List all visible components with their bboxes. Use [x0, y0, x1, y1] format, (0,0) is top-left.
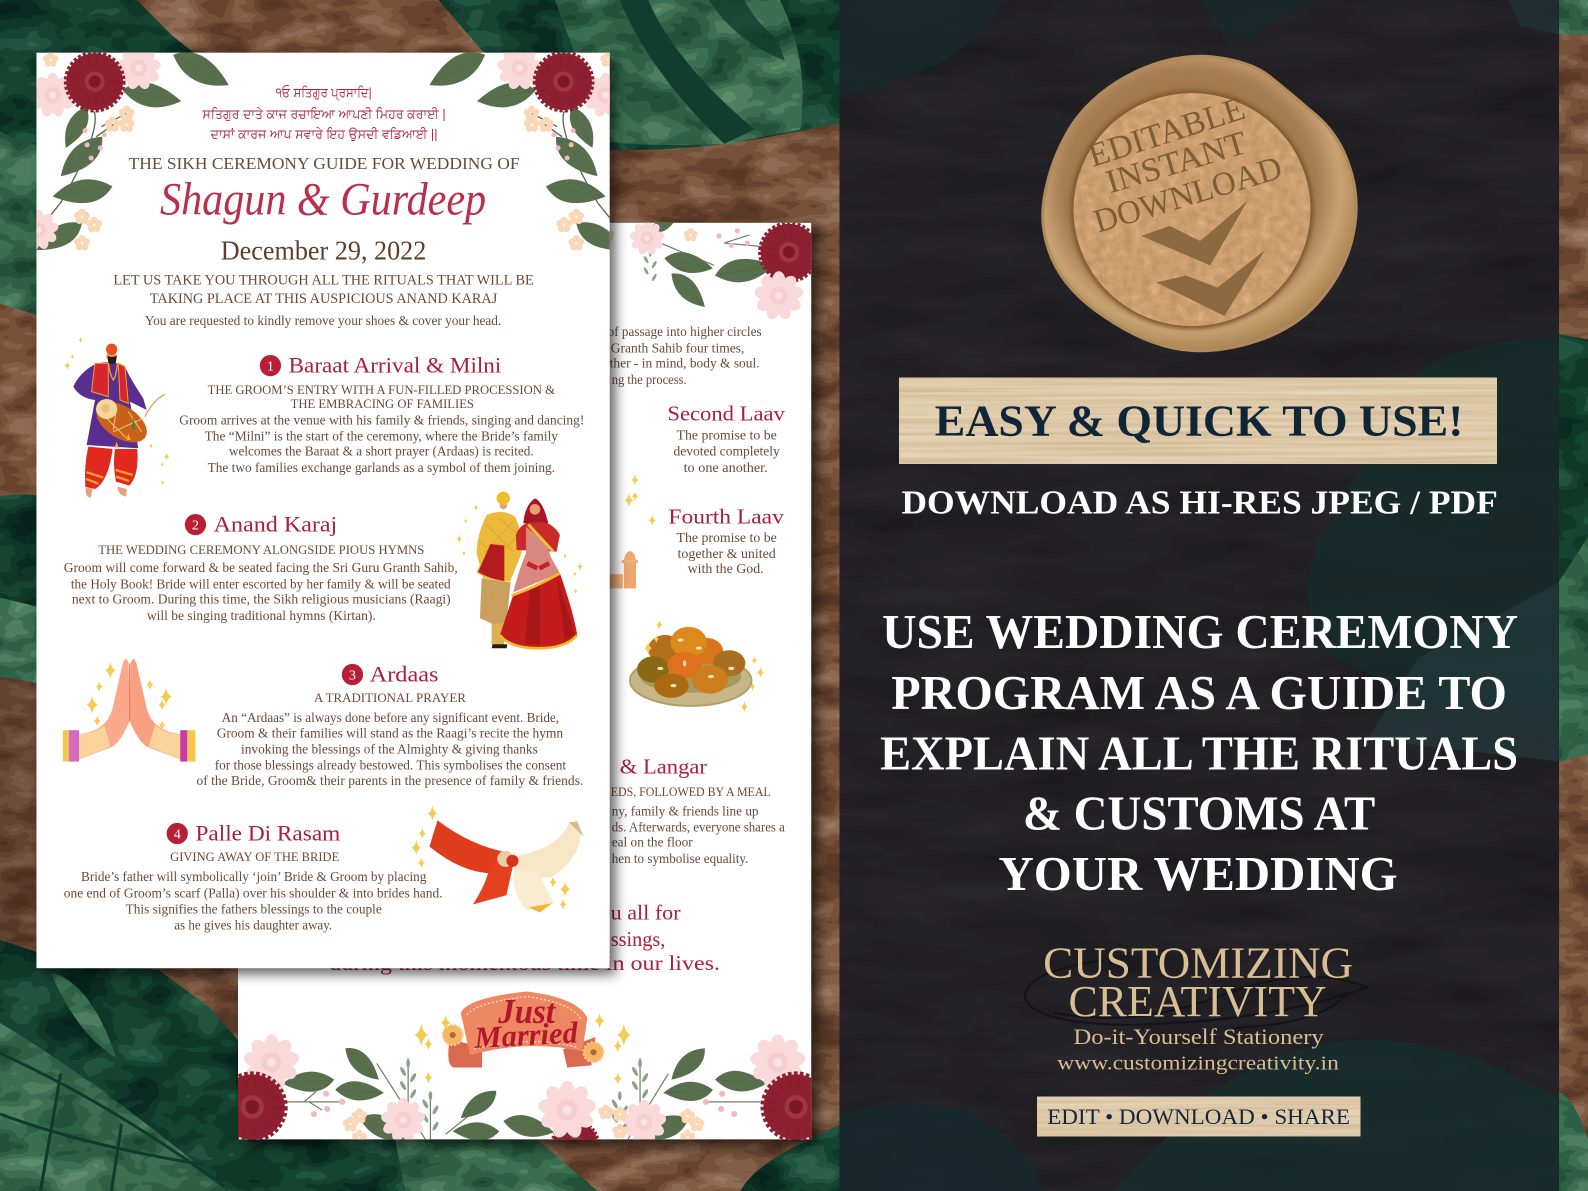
- section 3: ardaas: Groom & their families will stand as the Raagi’s recite the hymn: [217, 725, 563, 740]
- section 2: anand karaj: [64, 512, 458, 624]
- section 4: palle di rasam: [64, 821, 443, 933]
- intro text: You are requested to kindly remove your shoes & cover your head.: [145, 313, 501, 328]
- intro text: LET US TAKE YOU THROUGH ALL THE RITUALS THAT WILL BE: [113, 273, 534, 289]
- section: ang langar: ny, family & friends line up: [612, 803, 759, 818]
- closing thank you message: u all for: [611, 901, 681, 925]
- just married banner: Just: [497, 993, 556, 1031]
- main message: YOUR WEDDING: [999, 847, 1398, 901]
- fourth laav: with the God.: [688, 561, 764, 576]
- icon: bride and groom: [457, 492, 583, 648]
- wax seal badge: DOWNLOAD: [1089, 149, 1286, 241]
- section 2: anand karaj: Anand Karaj: [214, 512, 337, 537]
- brand logo: www.customizingcreativity.in: [1057, 1052, 1339, 1074]
- brand logo: CREATIVITY: [1068, 976, 1327, 1026]
- fourth laav: Fourth Laav: [668, 505, 784, 529]
- gurmukhi blessing: [202, 85, 446, 142]
- section 3: ardaas: for those blessings already bestowed. This symbolises the consent: [215, 758, 566, 773]
- section 3: ardaas: [196, 662, 583, 788]
- just married banner: [414, 991, 631, 1085]
- main message: & CUSTOMS AT: [1023, 786, 1375, 840]
- section 3: ardaas: of the Bride, Groom& their parents in the presence of family & friends.: [196, 773, 583, 788]
- section: ang langar: hen to symbolise equality.: [612, 851, 748, 866]
- section 4: palle di rasam: This signifies the fathers blessings to the couple: [126, 902, 382, 917]
- title: THE SIKH CEREMONY GUIDE FOR WEDDING OF: [129, 154, 520, 173]
- section 3: ardaas: invoking the blessings of the Almighty & giving thanks: [241, 741, 538, 756]
- section 4: palle di rasam: as he gives his daughter away.: [174, 918, 332, 933]
- section 3: ardaas: 3: [349, 668, 356, 684]
- closing thank you message: [329, 901, 720, 975]
- brand logo: CUSTOMIZING: [1043, 937, 1353, 987]
- section: ang langar: EDS, FOLLOWED BY A MEAL: [611, 785, 771, 799]
- bottom floral border: [238, 1034, 812, 1140]
- main message: USE WEDDING CEREMONY: [882, 605, 1518, 659]
- section 4: palle di rasam: one end of Groom’s scarf (Palla) over his shoulder & into brides hand.: [64, 885, 443, 901]
- icon: dhol player: [64, 337, 169, 498]
- section 1: baraat arrival and milni: 1: [267, 359, 274, 375]
- section 3: ardaas: Ardaas: [370, 662, 439, 687]
- intro text: [113, 273, 534, 328]
- gurmukhi blessing: ੧ਓ ਸਤਿਗੁਰ ਪ੍ਰਸਾਦਿ|: [275, 85, 372, 103]
- gurmukhi blessing: ਦਾਸਾਂ ਕਾਰਜ ਆਪ ਸਵਾਰੇ ਇਹ ਉਸਦੀ ਵਡਿਆਈ ||: [210, 127, 438, 142]
- second laav: The promise to be: [677, 428, 777, 443]
- section 1: baraat arrival and milni: [179, 353, 584, 475]
- icon: praying hands: [63, 659, 195, 762]
- section 3: ardaas: A TRADITIONAL PRAYER: [314, 691, 466, 705]
- fourth laav: together & united: [678, 546, 776, 561]
- section 1: baraat arrival and milni: welcomes the Baraat & a short prayer (Ardaas) is recited.: [229, 444, 534, 460]
- icon: temple tower: [608, 474, 656, 588]
- icon: plate of ladoos: [630, 620, 764, 713]
- fourth laav: The promise to be: [677, 530, 777, 545]
- second laav: Second Laav: [667, 401, 785, 425]
- section 4: palle di rasam: Bride’s father will symbolically ‘join’ Bride & Groom by placing: [81, 869, 427, 884]
- section 1: baraat arrival and milni: THE GROOM’S ENTRY WITH A FUN-FILLED PROCESSION &: [208, 383, 555, 397]
- dark right panel: [840, 0, 1559, 1191]
- section: ang langar: ds. Afterwards, everyone shares a: [612, 819, 785, 834]
- first laav text: of passage into higher circles: [608, 324, 762, 339]
- section 2: anand karaj: the Holy Book! Bride will enter escorted by her family & will be seated: [71, 576, 451, 591]
- second laav: [667, 401, 785, 475]
- top right floral corner: [430, 52, 610, 250]
- icon: palla scarf knot: [411, 805, 583, 912]
- second laav: devoted completely: [673, 444, 780, 459]
- section 3: ardaas: An “Ardaas” is always done before any significant event. Bride,: [222, 710, 559, 725]
- section: ang langar: eal on the floor: [612, 835, 693, 850]
- main message: PROGRAM AS A GUIDE TO: [891, 666, 1507, 720]
- wax seal badge: INSTANT: [1102, 124, 1251, 201]
- gurmukhi blessing: ਸਤਿਗੁਰ ਦਾਤੇ ਕਾਜ ਰਚਾਇਆ ਆਪਣੀ ਮਿਹਰ ਕਰਾਈ |: [202, 106, 446, 121]
- fourth laav: [668, 505, 784, 576]
- closing thank you message: during this momentous time in our lives.: [329, 951, 720, 975]
- main message: EXPLAIN ALL THE RITUALS: [880, 727, 1518, 781]
- section 2: anand karaj: will be singing traditional hymns (Kirtan).: [147, 608, 376, 624]
- wood banner: easy and quick: [899, 378, 1497, 464]
- front card: program page one: [18, 44, 629, 974]
- second laav: to one another.: [684, 460, 768, 475]
- back card: program page two: [220, 218, 829, 1167]
- couple names: Shagun & Gurdeep: [160, 174, 486, 226]
- section 1: baraat arrival and milni: Baraat Arrival & Milni: [289, 353, 501, 378]
- section 4: palle di rasam: 4: [174, 827, 181, 843]
- top floral corner: [610, 222, 812, 319]
- main message: [880, 605, 1518, 901]
- top left floral corner: [36, 52, 229, 250]
- intro text: TAKING PLACE AT THIS AUSPICIOUS ANAND KARAJ: [150, 291, 498, 307]
- first laav text: [608, 324, 762, 387]
- wood banner: edit download share: EDIT • DOWNLOAD • SHARE: [1047, 1104, 1350, 1129]
- section 2: anand karaj: 2: [192, 518, 199, 534]
- first laav text: Granth Sahib four times,: [611, 340, 744, 355]
- closing thank you message: ssings,: [611, 927, 665, 951]
- section 1: baraat arrival and milni: The two families exchange garlands as a symbol of them joining.: [208, 460, 555, 475]
- section 4: palle di rasam: GIVING AWAY OF THE BRIDE: [170, 850, 340, 864]
- wood banner: easy and quick: EASY & QUICK TO USE!: [935, 395, 1463, 445]
- download subtitle: DOWNLOAD AS HI-RES JPEG / PDF: [901, 484, 1498, 521]
- section 2: anand karaj: next to Groom. During this time, the Sikh religious musicians (Raagi): [72, 592, 451, 608]
- brand logo: Do-it-Yourself Stationery: [1074, 1024, 1325, 1049]
- brand logo: [1025, 937, 1367, 1074]
- section: ang langar: & Langar: [620, 755, 707, 779]
- section 1: baraat arrival and milni: Groom arrives at the venue with his family & friends, singing and dancing!: [179, 412, 584, 427]
- section 1: baraat arrival and milni: The “Milni” is the start of the ceremony, where the Bride’s family: [205, 429, 558, 444]
- section 2: anand karaj: THE WEDDING CEREMONY ALONGSIDE PIOUS HYMNS: [98, 543, 424, 557]
- first laav text: ng the process.: [612, 372, 687, 387]
- wedding date: December 29, 2022: [221, 235, 426, 265]
- wax seal badge: EDITABLE: [1084, 90, 1249, 175]
- wax seal badge: [1043, 56, 1356, 351]
- just married banner: Married: [473, 1015, 579, 1055]
- section 2: anand karaj: Groom will come forward & be seated facing the Sri Guru Granth Sahib,: [64, 560, 458, 575]
- wood banner: edit download share: [1037, 1097, 1360, 1136]
- section 1: baraat arrival and milni: THE EMBRACING OF FAMILIES: [291, 397, 474, 411]
- section 4: palle di rasam: Palle Di Rasam: [195, 821, 340, 846]
- first laav text: ther - in mind, body & soul.: [610, 356, 760, 371]
- section: ang langar: [611, 755, 785, 866]
